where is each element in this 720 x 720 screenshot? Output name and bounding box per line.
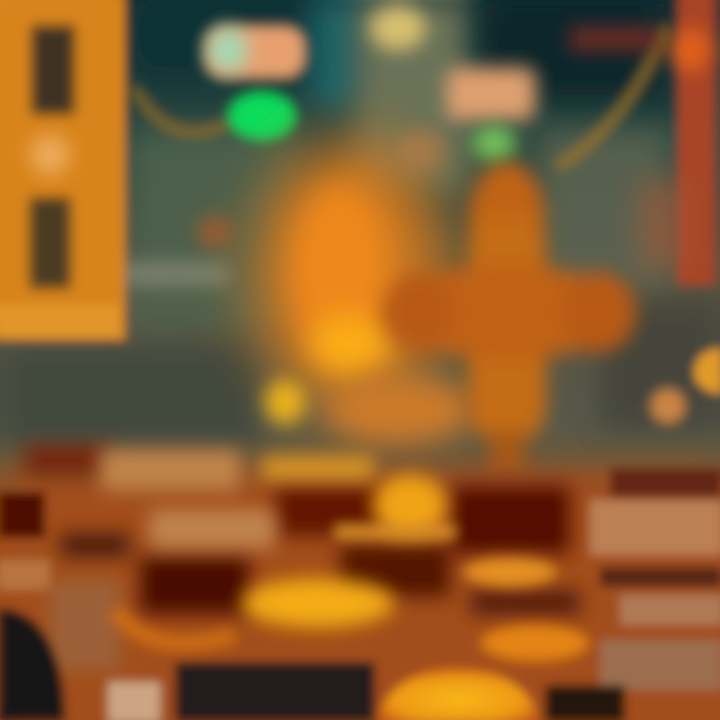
building on the left — [0, 0, 125, 340]
orange cross figure — [380, 162, 636, 475]
fire glow — [197, 130, 475, 445]
background: haze and sky — [0, 0, 720, 445]
dark cells — [0, 445, 720, 615]
yellow glowing dot — [265, 380, 305, 424]
red tower on the right — [570, 0, 714, 285]
orange bokeh lights — [650, 348, 720, 424]
windows — [30, 26, 74, 288]
green light — [228, 92, 296, 140]
pale yellow light — [370, 6, 426, 50]
small green light — [472, 125, 516, 161]
pale cells — [0, 450, 720, 690]
traffic light sign — [205, 26, 305, 78]
foreground glowing grid — [0, 445, 720, 720]
peach sign — [447, 68, 535, 120]
bright cells — [115, 456, 589, 661]
glowing orb at bottom — [378, 668, 538, 720]
dark foreground shapes — [0, 608, 625, 720]
hanging wires — [135, 30, 665, 165]
